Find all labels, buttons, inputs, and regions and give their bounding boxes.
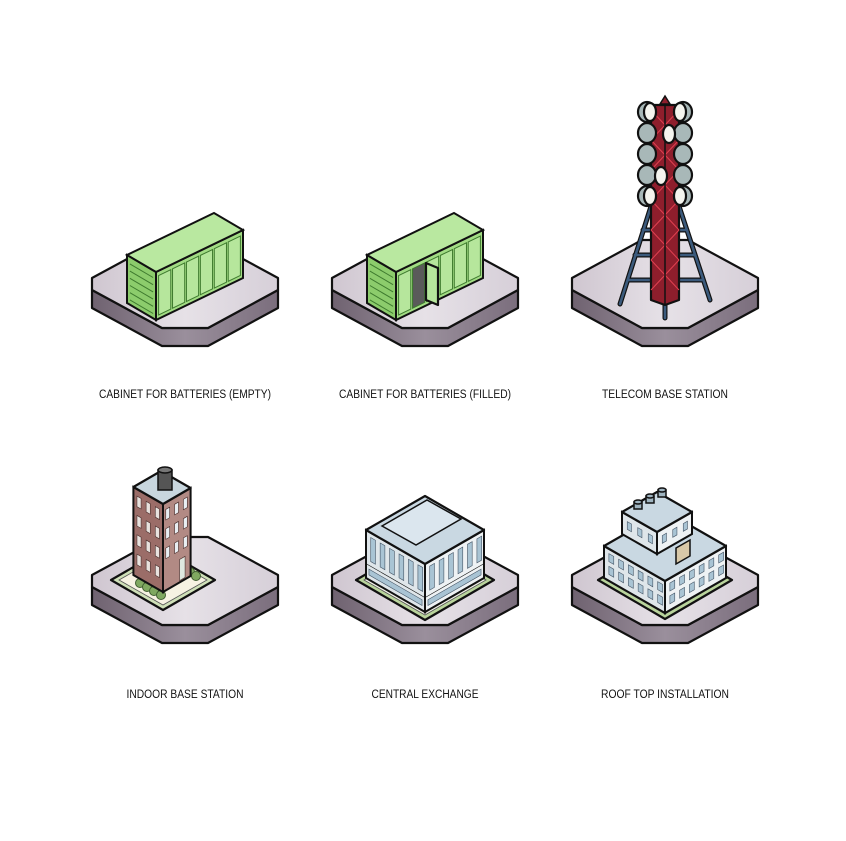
base: [92, 537, 278, 643]
base: [92, 240, 278, 346]
icon: brick building: [111, 467, 215, 610]
panel: cabinet filled: [332, 213, 518, 401]
panel: roof top installation: [572, 488, 758, 701]
label: CABINET FOR BATTERIES (FILLED): [339, 389, 511, 401]
icon: tower: [620, 96, 710, 318]
base: [572, 537, 758, 643]
panel: cabinet empty: [92, 213, 278, 401]
panel: telecom tower: [572, 96, 758, 401]
water tank: [158, 470, 172, 490]
base: [332, 537, 518, 643]
label: TELECOM BASE STATION: [602, 389, 728, 401]
label: INDOOR BASE STATION: [126, 689, 244, 701]
rooftop equipment: [676, 540, 690, 564]
base: [572, 240, 758, 346]
label: CABINET FOR BATTERIES (EMPTY): [99, 389, 271, 401]
icon: office building: [356, 496, 494, 620]
open door: [426, 263, 438, 305]
base: [332, 240, 518, 346]
label: CENTRAL EXCHANGE: [372, 689, 479, 701]
panel: central exchange: [332, 496, 518, 701]
panel: indoor base station: [92, 467, 278, 701]
icon: green cabinet: [127, 213, 243, 320]
label: ROOF TOP INSTALLATION: [601, 689, 729, 701]
icon: green cabinet with batteries: [367, 213, 483, 320]
icon: rooftop building: [598, 488, 732, 619]
